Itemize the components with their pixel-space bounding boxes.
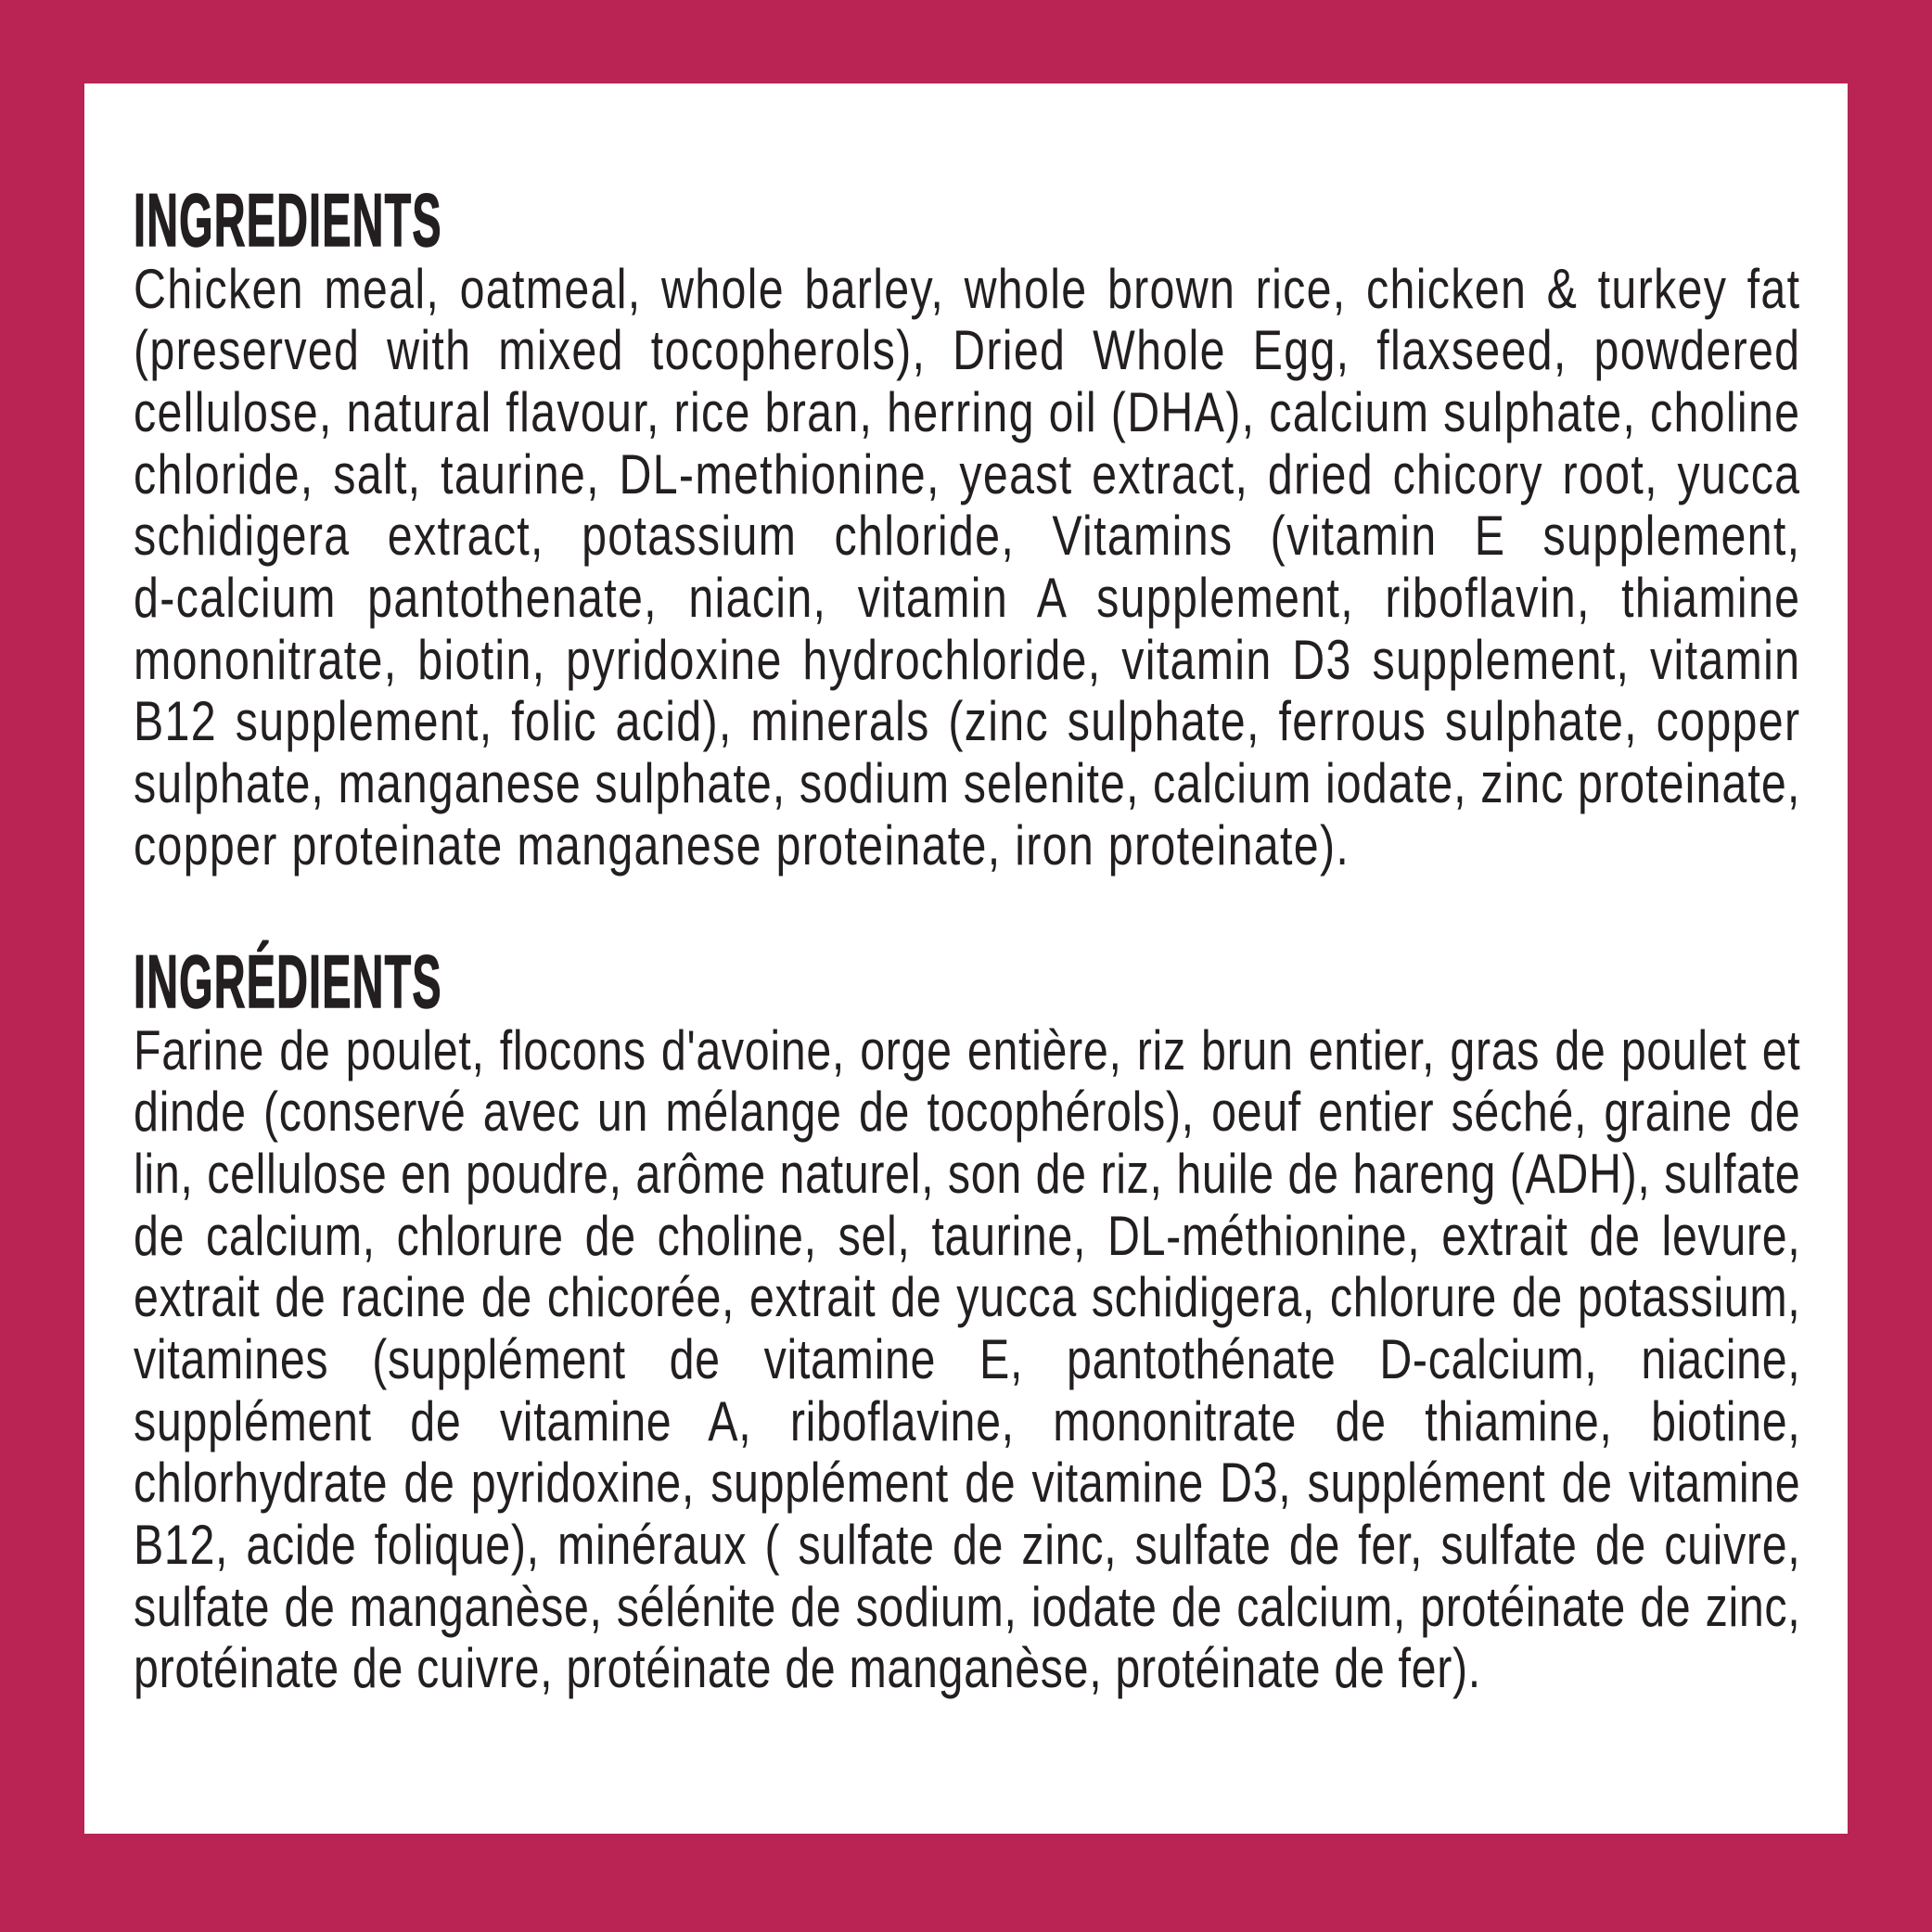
text block: English ingredients list: copper proteinate manganese proteinate, iron proteinate).	[134, 814, 1350, 876]
text block: English ingredients list: (preserved with mixed tocopherols), Dried Whole Egg, flaxseed, powdered	[134, 319, 1800, 381]
text block: English ingredients list: Chicken meal, oatmeal, whole barley, whole brown rice, chicken & turkey fat	[134, 258, 1800, 319]
text block: French ingredients list: Farine de poulet, flocons d'avoine, orge entière, riz brun entier, gras de poulet et	[134, 1018, 1800, 1081]
text block: French ingredients list: lin, cellulose en poudre, arôme naturel, son de riz, huile de hareng (ADH), sulfate	[134, 1143, 1800, 1205]
text block: French ingredients list: vitamines (supplément de vitamine E, pantothénate D-calcium, niacine,	[134, 1328, 1800, 1390]
text block: English ingredients list: sulphate, manganese sulphate, sodium selenite, calcium iodate, zinc proteinate,	[134, 752, 1800, 814]
text block: English ingredients list: chloride, salt, taurine, DL-methionine, yeast extract, dried chicory root, yucca	[134, 443, 1800, 505]
text block: English ingredients list: B12 supplement, folic acid), minerals (zinc sulphate, ferrous sulphate, copper	[134, 690, 1800, 752]
text block: French ingredients list: chlorhydrate de pyridoxine, supplément de vitamine D3, supplément de vitamine	[134, 1452, 1800, 1514]
text block: English ingredients list: cellulose, natural flavour, rice bran, herring oil (DHA), calcium sulphate, choline	[134, 381, 1800, 443]
text block: French ingredients list: B12, acide folique), minéraux ( sulfate de zinc, sulfate de fer, sulfate de cuivre,	[134, 1514, 1800, 1576]
text block: French ingredients list: dinde (conservé avec un mélange de tocophérols), oeuf entier séché, graine de	[134, 1081, 1800, 1143]
text block: French ingredients list: extrait de racine de chicorée, extrait de yucca schidigera, chlorure de potassium,	[134, 1266, 1800, 1328]
heading: INGREDIENTS: INGREDIENTS	[134, 179, 442, 262]
heading: INGRÉDIENTS: INGRÉDIENTS	[134, 940, 442, 1024]
text block: French ingredients list: sulfate de manganèse, sélénite de sodium, iodate de calcium, protéinate de zinc,	[134, 1576, 1800, 1638]
text block: English ingredients list	[134, 258, 1800, 876]
text block: French ingredients list: de calcium, chlorure de choline, sel, taurine, DL-méthionine, extrait de levure,	[134, 1205, 1800, 1267]
text block: French ingredients list: protéinate de cuivre, protéinate de manganèse, protéinate de fer).	[134, 1637, 1481, 1699]
text block: English ingredients list: schidigera extract, potassium chloride, Vitamins (vitamin E supplement,	[134, 505, 1800, 567]
text block: French ingredients list	[134, 1018, 1800, 1699]
text block: English ingredients list: mononitrate, biotin, pyridoxine hydrochloride, vitamin D3 supplement, vitamin	[134, 629, 1800, 691]
text block: English ingredients list: d-calcium pantothenate, niacin, vitamin A supplement, riboflavin, thiamine	[134, 567, 1800, 629]
text block: French ingredients list: supplément de vitamine A, riboflavine, mononitrate de thiamine, biotine,	[134, 1390, 1800, 1452]
